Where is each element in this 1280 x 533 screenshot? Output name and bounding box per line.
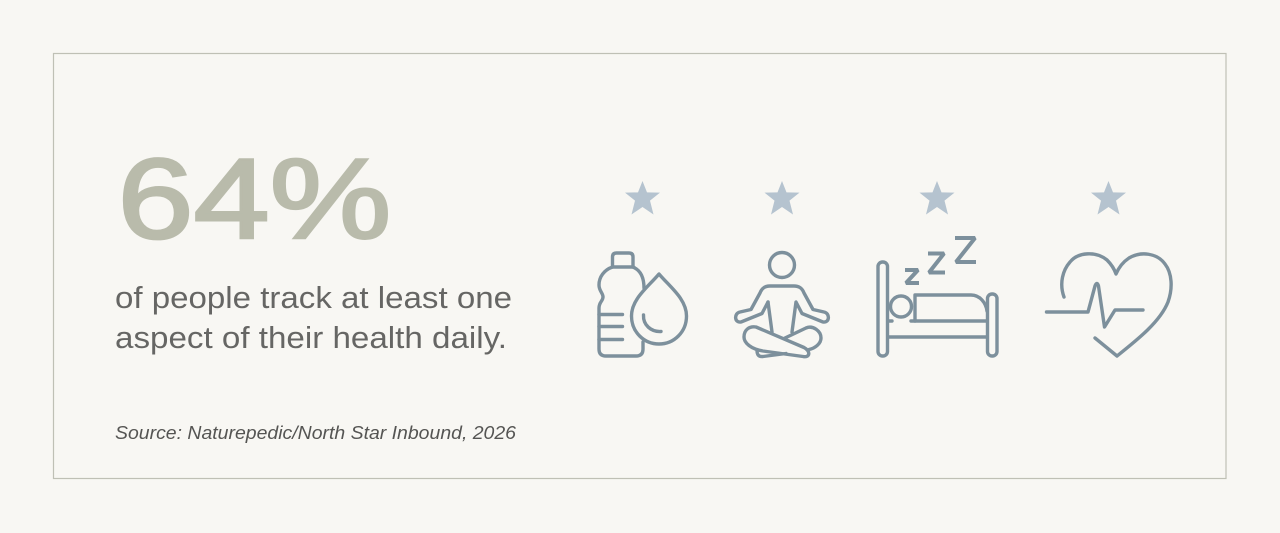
icon: meditating person — [736, 252, 828, 357]
icon: water bottle and drop — [599, 253, 686, 356]
text block: description: aspect of their health daily. — [115, 321, 507, 355]
icon row: stars — [625, 181, 1126, 214]
text block: description: of people track at least one — [115, 281, 512, 315]
icon: bed with sleeping person — [878, 262, 997, 356]
panel: bordered frame — [54, 54, 1226, 478]
text block: description — [115, 281, 512, 355]
statistic: 64%: 64% — [118, 135, 391, 262]
source note: Source: Naturepedic/North Star Inbound, 2026 — [115, 423, 517, 443]
icon: heart with pulse line — [1046, 254, 1171, 356]
icon: sleep letters — [905, 238, 976, 283]
